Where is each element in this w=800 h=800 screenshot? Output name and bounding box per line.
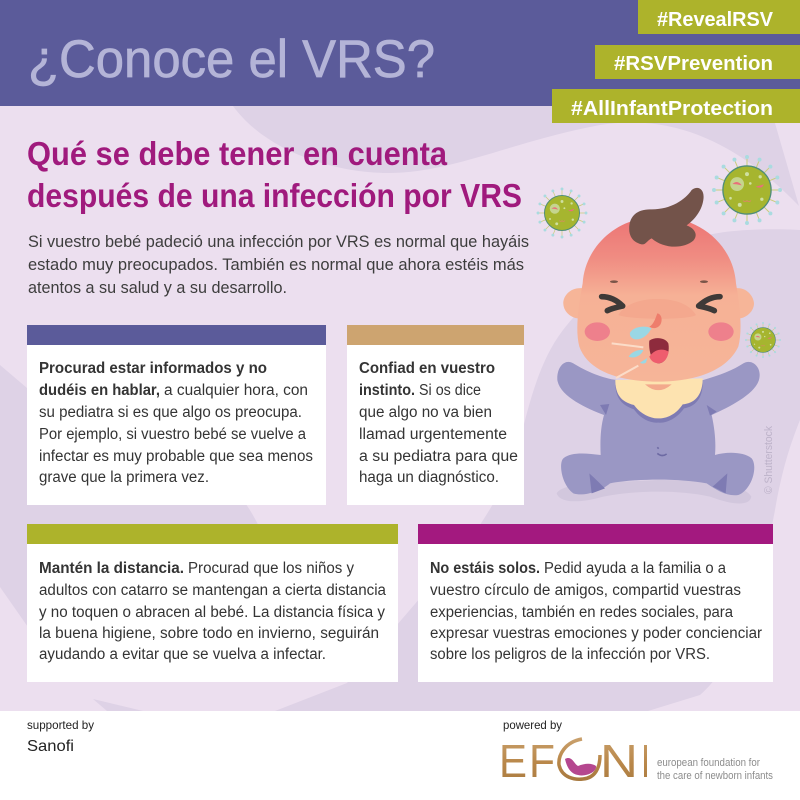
- panel: instinct: haga un diagnóstico.: [359, 469, 499, 486]
- panel: not alone: sobre los peligros de la infección por VRS.: [430, 646, 710, 663]
- baby body: [557, 362, 760, 495]
- logo mark: [559, 739, 600, 779]
- eyes: [602, 297, 720, 311]
- panel: instinct: instinto.: [359, 382, 415, 399]
- panel: instinct: llamad urgentemente: [359, 426, 507, 443]
- supported by: Sanofi: [27, 738, 74, 755]
- logo: EFCNI: [499, 735, 773, 787]
- icon: virus small right: [745, 322, 781, 358]
- panel: not alone: No estáis solos.: [430, 560, 540, 577]
- eyebrows: [610, 280, 708, 283]
- baby shadow: [557, 480, 751, 504]
- logo: EFCNI: european foundation for: [657, 757, 760, 769]
- panel: instinct: Confiad en vuestro: [359, 360, 495, 377]
- panel: distance: ayudando a evitar que se vuelva a infectar.: [39, 646, 326, 663]
- panel: instinct: Si os dice: [419, 382, 481, 399]
- panel: informed: grave que la primera vez.: [39, 469, 209, 486]
- title: ¿Conoce el VRS?: [28, 30, 435, 89]
- hashtag tag: RevealRSV: [638, 0, 800, 34]
- icon: virus top right: [712, 155, 782, 225]
- bib: [615, 378, 703, 423]
- heading: [27, 135, 522, 214]
- hashtag tag: RevealRSV: #RevealRSV: [657, 9, 774, 31]
- hashtag tag: RSVPrevention: #RSVPrevention: [614, 53, 773, 75]
- panel: not alone: vuestro círculo de amigos, compartid vuestras: [430, 582, 741, 599]
- panel: distance: y no toquen o abracen al bebé. La distancia física y: [39, 604, 385, 621]
- neck: [645, 384, 672, 390]
- snot and breath: [612, 327, 651, 378]
- panel: informed: a cualquier hora, con: [164, 382, 308, 399]
- supported by: supported by: [27, 718, 94, 732]
- panel: distance: Mantén la distancia.: [39, 560, 184, 577]
- powered by: powered by: [503, 718, 562, 732]
- header band: [0, 0, 800, 106]
- nose: [649, 313, 662, 328]
- hashtag tag: AllInfantProtection: #AllInfantProtection: [571, 98, 773, 120]
- panel: instinct: que algo no va bien: [359, 404, 492, 421]
- panel: informed: dudéis en hablar,: [39, 382, 160, 399]
- illustration: sick baby: [557, 188, 760, 504]
- background swoosh: top: [233, 106, 799, 206]
- panel: not alone: Pedid ayuda a la familia o a: [544, 560, 726, 577]
- panel: distance: adultos con catarro se mantengan a cierta distancia: [39, 582, 386, 599]
- panel: not alone: experiencias, también en redes sociales, para: [430, 604, 733, 621]
- ears: [563, 288, 754, 319]
- hashtag tag: RSVPrevention: [595, 45, 800, 79]
- panel: distance: [27, 524, 398, 682]
- footer band: [0, 711, 800, 800]
- panel: informed: [27, 325, 326, 505]
- heading: después de una infección por VRS: [27, 177, 522, 214]
- supported by: [27, 718, 94, 755]
- panel: informed: Procurad estar informados y no: [39, 360, 267, 377]
- panel: informed: Por ejemplo, si vuestro bebé se vuelve a: [39, 426, 306, 443]
- head: [577, 217, 741, 382]
- intro text: estado muy preocupados. También es normal que ahora estéis más: [28, 255, 524, 274]
- logo: EFCNI: F: [529, 735, 555, 787]
- logo: EFCNI: I: [641, 735, 650, 787]
- logo: EFCNI: E: [499, 735, 527, 787]
- background swoosh: left: [0, 365, 265, 630]
- cheeks: [585, 322, 734, 341]
- mouth: [649, 338, 669, 363]
- nose band: [618, 299, 696, 319]
- intro text: [28, 232, 529, 297]
- panel: instinct: a su pediatra para que: [359, 448, 518, 465]
- background swoosh: right: [275, 229, 800, 711]
- panel: instinct: [347, 325, 524, 505]
- panel: distance: la buena higiene, sobre todo en invierno, seguirán: [39, 625, 379, 642]
- panel: informed: su pediatra si es que algo os preocupa.: [39, 404, 302, 421]
- logo: EFCNI: N: [600, 735, 638, 787]
- panel: not alone: [418, 524, 773, 682]
- heading: Qué se debe tener en cuenta: [27, 135, 448, 172]
- panel: distance: Procurad que los niños y: [188, 560, 354, 577]
- photo credit: © Shutterstock: [763, 426, 775, 494]
- panel: informed: infectar es muy probable que sea menos: [39, 448, 313, 465]
- intro text: Si vuestro bebé padeció una infección por VRS es normal que hayáis: [28, 232, 529, 251]
- panel: not alone: expresar vuestras emociones y poder concienciar: [430, 625, 762, 642]
- background swoosh: bottom wedge: [93, 699, 143, 711]
- intro text: atentos a su salud y a su desarrollo.: [28, 278, 287, 297]
- icon: virus left: [537, 188, 587, 238]
- hashtag tag: AllInfantProtection: [552, 89, 800, 123]
- logo: EFCNI: the care of newborn infants: [657, 770, 773, 782]
- hair: [629, 188, 704, 247]
